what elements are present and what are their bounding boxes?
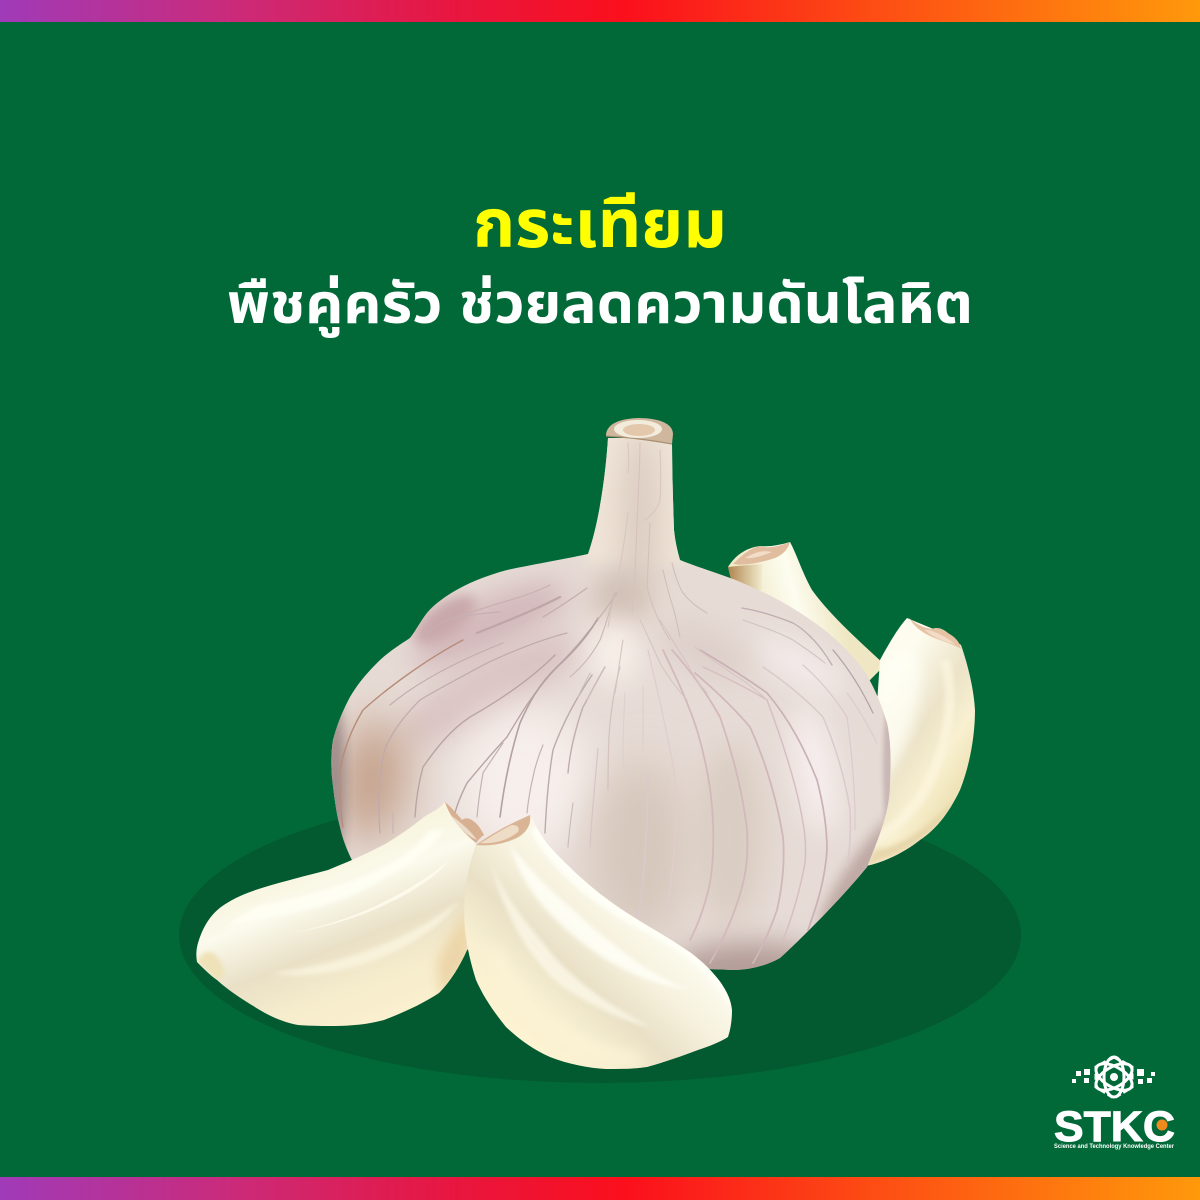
top gradient bar bbox=[0, 0, 1200, 22]
fibre lines: stem bbox=[570, 443, 707, 700]
back clove right bbox=[866, 618, 975, 866]
STKC logo bbox=[1054, 1057, 1175, 1151]
logo tagline: Science and Technology Knowledge Center bbox=[1054, 1144, 1175, 1150]
ground shadow bbox=[179, 787, 1021, 1083]
bulb body bbox=[331, 438, 890, 970]
logo wordmark: STKC bbox=[1054, 1103, 1175, 1151]
bottom gradient bar bbox=[0, 1177, 1200, 1200]
fibre lines: left side bbox=[340, 585, 620, 847]
fibre lines: right side bbox=[623, 608, 877, 963]
title: กระเทียม bbox=[473, 186, 727, 262]
stem shading bbox=[585, 415, 685, 565]
front right clove bbox=[464, 815, 732, 1069]
logo orange dot bbox=[1156, 1120, 1168, 1130]
logo icon: atom bbox=[1092, 1057, 1136, 1098]
subtitle: พืชคู่ครัว ช่วยลดความดันโลหิต bbox=[227, 272, 973, 338]
stem top rim bbox=[606, 418, 673, 444]
illustration: garlic bulb and cloves bbox=[196, 415, 975, 1069]
logo pixels bbox=[1072, 1069, 1155, 1084]
front left clove bbox=[196, 802, 484, 1026]
back clove upper bbox=[728, 542, 885, 690]
bulb shading bbox=[408, 574, 572, 676]
